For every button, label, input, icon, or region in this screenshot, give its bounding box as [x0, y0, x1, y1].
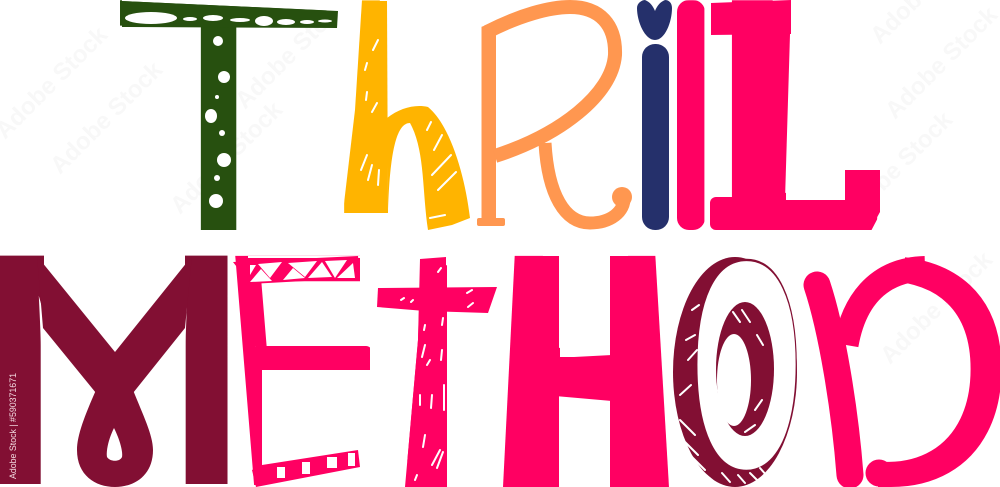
faint watermark: Adobe Stock — [500, 106, 623, 229]
faint watermark — [0, 0, 1000, 369]
faint watermark: Adobe Stock — [45, 56, 168, 179]
faint watermark: Adobe Stock — [880, 1, 1000, 124]
word: METHOD — [0, 177, 1000, 487]
faint watermark: Adobe Stock — [835, 106, 958, 229]
word: THRILL — [120, 0, 880, 230]
stock id label: Adobe Stock | #590371671 — [8, 373, 18, 479]
letter i with heart dot — [637, 0, 672, 230]
faint watermark: Adobe Stock — [875, 246, 998, 369]
faint watermark: Adobe Stock — [165, 96, 288, 219]
